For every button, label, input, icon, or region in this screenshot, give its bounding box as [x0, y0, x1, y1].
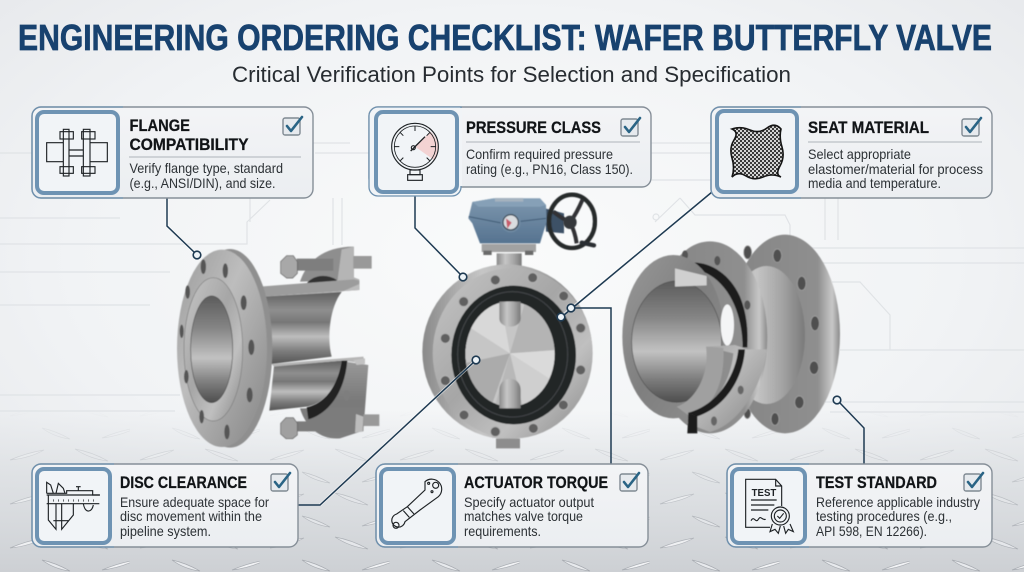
handwheel: [549, 195, 595, 248]
description line 3: media and temperature.: [808, 176, 941, 191]
description line 2: disc movement within the: [120, 509, 262, 524]
heading: SEAT MATERIAL: [808, 118, 929, 137]
description: Confirm required pressure: [466, 147, 613, 162]
icon: checkbox: [962, 118, 981, 136]
left flange assembly: [177, 247, 379, 448]
panel: actuator torque: [376, 464, 648, 547]
description: Ensure adequate space for: [120, 495, 269, 510]
description line 2: rating (e.g., PN16, Class 150).: [466, 162, 633, 177]
right flange assembly: [622, 235, 840, 433]
description: Reference applicable industry: [816, 495, 980, 510]
panel: disc clearance: [32, 464, 298, 547]
butterfly valve: [422, 195, 595, 448]
description: Specify actuator output: [464, 495, 594, 510]
panel: pressure class: [369, 107, 651, 196]
leader: test standard: [833, 396, 864, 464]
description: Select appropriate: [808, 147, 911, 162]
actuator gearbox: [468, 198, 564, 267]
icon: checkbox: [271, 473, 290, 491]
icon: caliper: [47, 482, 100, 529]
description line 3: requirements.: [464, 524, 541, 539]
description line 2: matches valve torque: [464, 509, 583, 524]
heading: PRESSURE CLASS: [466, 118, 601, 137]
icon: flange joint: [47, 129, 107, 176]
panel: flange compatibility: [32, 107, 313, 198]
description line 2: elastomer/material for process: [808, 162, 983, 177]
heading: DISC CLEARANCE: [120, 473, 247, 492]
heading: ACTUATOR TORQUE: [464, 473, 608, 492]
icon: pressure gauge: [392, 123, 438, 180]
leader: actuator torque: [567, 304, 611, 464]
icon: test certificate: TEST: [752, 488, 776, 499]
description line 2: (e.g., ANSI/DIN), and size.: [130, 176, 276, 191]
description line 2: testing procedures (e.g.,: [816, 509, 952, 524]
icon: checkbox: [964, 473, 983, 491]
panel: seat material: [711, 107, 992, 198]
subtitle: Critical Verification Points for Selection and Specification: [232, 62, 791, 87]
description: Verify flange type, standard: [130, 161, 283, 176]
heading: TEST STANDARD: [816, 473, 937, 492]
icon: checkbox: [620, 473, 639, 491]
panel: test standard: [727, 464, 992, 547]
valve body: [422, 264, 593, 448]
icon: test certificate: [746, 479, 793, 533]
description line 3: API 598, EN 12266).: [816, 524, 927, 539]
leader: pressure class: [415, 196, 467, 281]
icon: checkbox: [621, 118, 640, 136]
description line 3: pipeline system.: [120, 524, 211, 539]
heading: FLANGE: [130, 116, 190, 135]
leader: flange compatibility: [167, 198, 201, 259]
leader: seat material: [557, 192, 712, 321]
icon: checkbox: [283, 117, 302, 135]
leader: disc clearance: [298, 356, 480, 505]
heading line 2: COMPATIBILITY: [130, 135, 249, 154]
icon: elastomer swatch: [731, 125, 783, 179]
icon: torque wrench: [392, 479, 442, 528]
